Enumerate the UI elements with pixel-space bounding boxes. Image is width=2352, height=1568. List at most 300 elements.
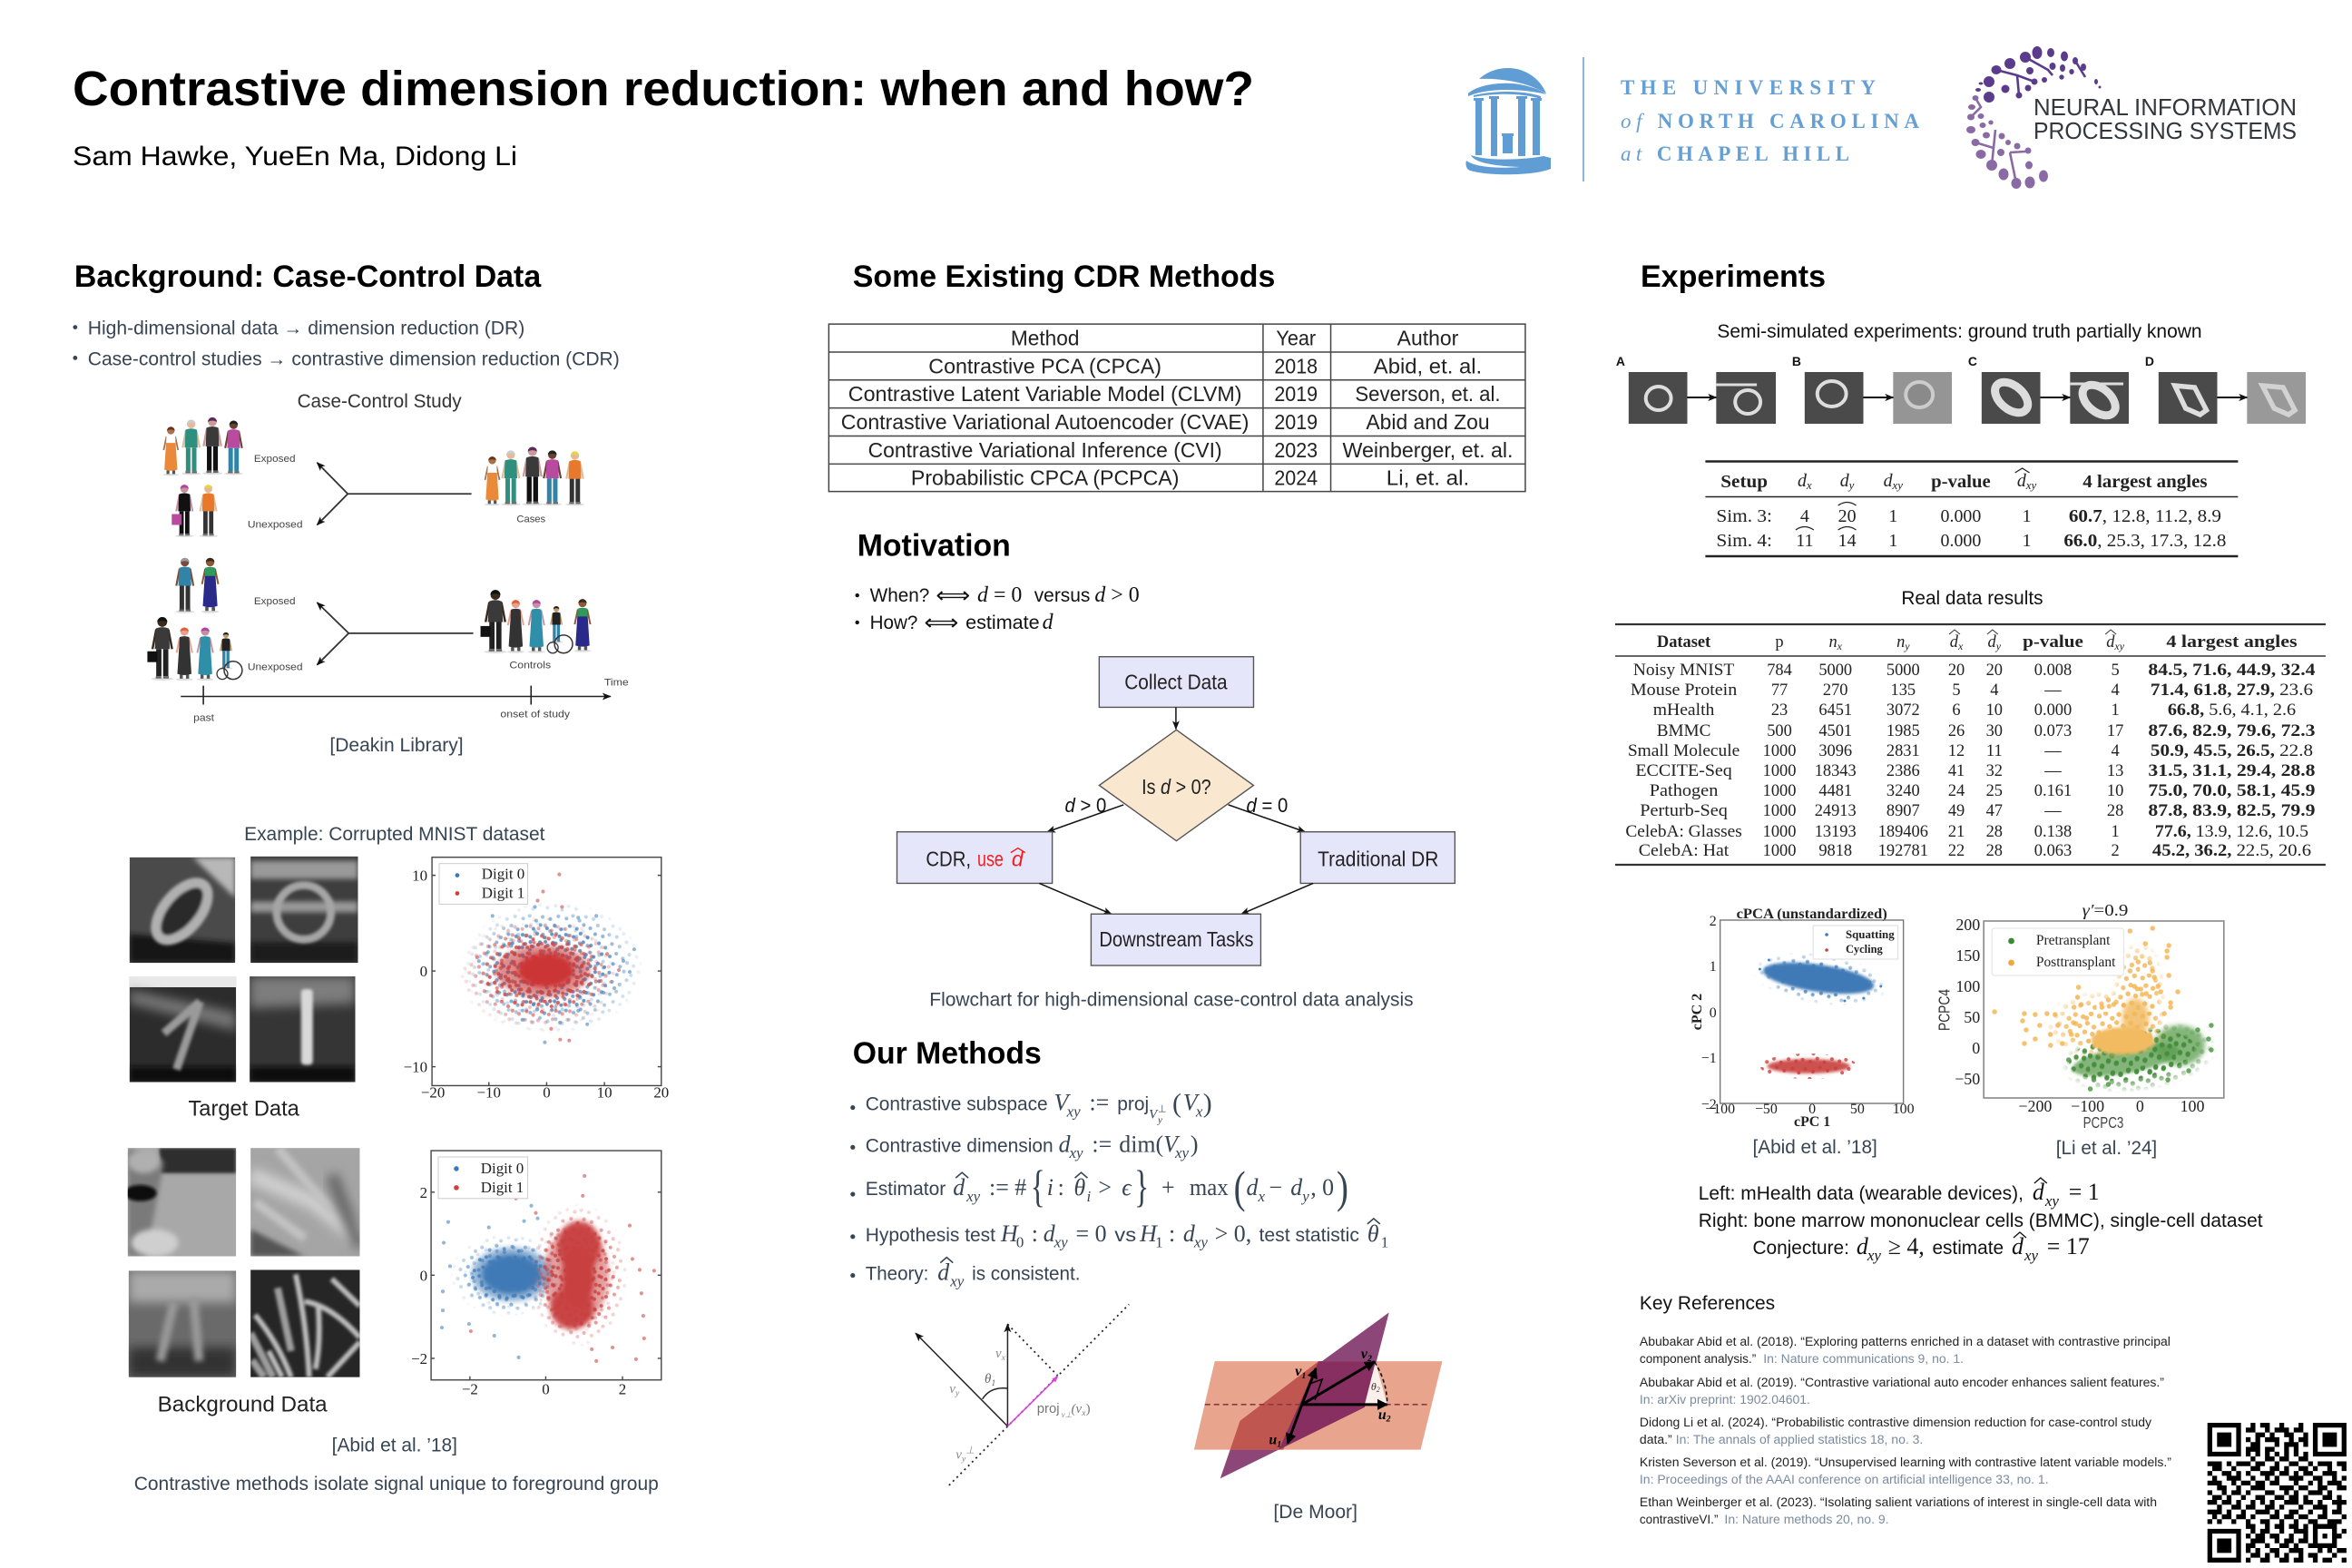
text block: experiment notes: xy — [2024, 1247, 2038, 1264]
table: simulation results: 11 — [1796, 531, 1813, 551]
tick labels: 0 — [542, 1381, 550, 1398]
estimator: + — [1161, 1174, 1175, 1200]
tick labels: 10 — [412, 867, 427, 885]
text block: experiment notes: Conjecture: — [1752, 1238, 1849, 1259]
logo wordmark — [2034, 93, 2297, 144]
heading: experiments: Experiments — [1641, 260, 1826, 294]
table: real data results: 77 — [1771, 681, 1788, 699]
node: downstream tasks — [1091, 914, 1260, 965]
image: target digit 1 slanted — [129, 976, 236, 1082]
tick labels — [411, 1184, 626, 1398]
table: real data results: 50.9, 45.5, 26.5, 22.8 — [2151, 741, 2313, 760]
estimator: Estimator — [866, 1179, 946, 1200]
table header — [1657, 630, 2298, 652]
table: real data results: Perturb-Seq — [1640, 801, 1728, 819]
estimator: d — [953, 1174, 965, 1200]
section: key references and QR — [1640, 1293, 2347, 1563]
table: real data results: 21 — [1948, 822, 1965, 840]
text block: experiment notes: estimate — [1932, 1238, 2004, 1259]
tick labels: −2 — [462, 1381, 478, 1398]
table: existing methods: Contrastive PCA (CPCA) — [928, 354, 1161, 377]
image: background grass light — [250, 1148, 359, 1256]
table: simulation results: Sim. 4: — [1716, 531, 1772, 551]
icon: controls people — [481, 590, 591, 653]
citation: [Abid et al. ’18] — [332, 1435, 457, 1455]
figure: principal angles planes: v — [1361, 1347, 1367, 1362]
table: real data results: 23 — [1771, 701, 1788, 719]
logo wordmark — [1621, 76, 1919, 165]
table: real data results: 30 — [1986, 721, 2003, 740]
hypothesis test: 1 — [1155, 1234, 1163, 1251]
table: existing methods: 2019 — [1274, 382, 1318, 406]
text block: experiment notes: = 1 — [2069, 1179, 2100, 1205]
table: simulation results: 4 — [1800, 506, 1809, 526]
figure: projection geometry: v — [949, 1382, 956, 1396]
bullet list: motivation: d — [1043, 611, 1054, 634]
table: existing methods: Author — [1397, 326, 1459, 349]
figure: projection geometry: y — [955, 1388, 960, 1398]
table: real data results: 4 — [2112, 681, 2120, 699]
table: existing methods: Contrastive Latent Variable Model (CLVM) — [848, 382, 1242, 406]
legend: Digit 0 — [481, 1160, 524, 1177]
label: target data: Target Data — [188, 1096, 300, 1121]
contrastive dimension: xy — [1174, 1144, 1189, 1161]
hypothesis test: H — [1000, 1220, 1019, 1247]
table: real data results: 1000 — [1763, 801, 1796, 819]
estimator: { — [1031, 1161, 1045, 1211]
table header: y — [1995, 640, 2002, 652]
table: real data results: — — [2043, 741, 2062, 760]
table: real data results: 22 — [1948, 841, 1965, 859]
tick labels — [404, 867, 669, 1101]
bullet list: motivation: estimate — [965, 612, 1040, 633]
contrastive dimension: Contrastive dimension — [866, 1135, 1054, 1156]
table: real data results: 10 — [1986, 701, 2003, 719]
table: real data results: 3072 — [1886, 701, 1920, 719]
table: existing methods: Abid and Zou — [1366, 410, 1490, 434]
heading: key references: Key References — [1640, 1293, 1775, 1314]
table: real data results: 31.5, 31.1, 29.4, 28.8 — [2148, 761, 2315, 779]
figure: projection geometry — [916, 1304, 1129, 1485]
image: target digit 1 upright — [250, 976, 356, 1082]
QR code — [2208, 1423, 2347, 1563]
tick labels: 0 — [1808, 1102, 1816, 1117]
figure: case-control study diagram: Case-Control Study — [298, 391, 462, 412]
tick labels: 2 — [1710, 914, 1717, 929]
hypothesis test: > 0, — [1215, 1220, 1251, 1247]
sub-heading: corrupted MNIST: Example: Corrupted MNIST dataset — [244, 824, 545, 845]
text block: experiment notes: d — [1857, 1233, 1869, 1259]
panel: our methods — [850, 1036, 1442, 1523]
tick labels: −50 — [1755, 1102, 1778, 1117]
hypothesis test: xy — [1193, 1234, 1208, 1251]
table: real data results: 1 — [2112, 822, 2120, 840]
table: existing methods: 2019 — [1274, 410, 1318, 434]
table: real data results: 26 — [1948, 721, 1965, 740]
bullet list: motivation: versus — [1034, 585, 1090, 606]
contrastive subspace: V — [1183, 1090, 1200, 1116]
contrastive subspace: Contrastive subspace — [866, 1094, 1048, 1115]
contrastive subspace — [850, 1089, 1212, 1125]
arrow: collect to decision — [1175, 707, 1177, 729]
node: decision — [1099, 730, 1253, 841]
tick labels: 150 — [1955, 946, 1980, 965]
table: real data results — [1615, 624, 2326, 865]
table: real data results: 4 — [1990, 681, 1998, 699]
chart: contrastive scatter — [411, 1151, 662, 1398]
estimator: d — [1290, 1174, 1302, 1200]
references list: Didong Li et al. (2024). “Probabilistic contrastive dimension reduction for case-control study — [1640, 1415, 2151, 1429]
figure: projection geometry: x — [1081, 1408, 1086, 1418]
table: simulation results: p-value — [1931, 472, 1991, 492]
figure: projection geometry: θ — [985, 1372, 991, 1387]
tick labels: −200 — [2018, 1097, 2052, 1115]
table: existing methods: Method — [1011, 326, 1079, 349]
table: real data results: 20 — [1986, 661, 2003, 679]
contrastive subspace: V — [1054, 1090, 1072, 1116]
figure: projection geometry: proj — [1037, 1401, 1060, 1416]
estimator: : — [1058, 1174, 1064, 1200]
estimator: − — [1269, 1174, 1282, 1200]
label: background data: Background Data — [158, 1393, 328, 1417]
hypothesis test: vs — [1114, 1225, 1136, 1246]
figure: principal angles planes: 1 — [1277, 1440, 1281, 1450]
tick labels: 1 — [1710, 959, 1717, 975]
table header: d — [1950, 632, 1958, 651]
hypothesis test: d — [1183, 1220, 1195, 1247]
table: real data results: 87.8, 83.9, 82.5, 79.9 — [2148, 801, 2315, 819]
text block: experiment notes: xy — [1867, 1247, 1881, 1264]
table: real data results: 75.0, 70.0, 58.1, 45.9 — [2148, 781, 2315, 799]
image: background grass dark — [250, 1269, 359, 1377]
caption: flowchart: Flowchart for high-dimensional case-control data analysis — [929, 990, 1414, 1011]
logo wordmark: at CHAPEL HILL — [1621, 142, 1849, 165]
table: simulation results: x — [1806, 478, 1812, 492]
references list: Abubakar Abid et al. (2018). “Exploring patterns enriched in a dataset with contrastive principal — [1640, 1334, 2171, 1348]
table: real data results: 84.5, 71.6, 44.9, 32.4 — [2148, 661, 2315, 679]
contrastive subspace: := — [1089, 1090, 1109, 1116]
table: real data results: 12 — [1948, 741, 1965, 760]
legend — [1813, 926, 1898, 959]
tick labels: −1 — [1701, 1051, 1717, 1066]
table: real data results: 6451 — [1818, 701, 1852, 719]
logo wordmark: of NORTH CAROLINA — [1621, 110, 1919, 132]
text block: experiment notes: d — [2033, 1179, 2045, 1205]
tick labels: 0 — [420, 963, 427, 980]
tick labels: 0 — [543, 1083, 551, 1101]
contrastive dimension: := — [1092, 1131, 1112, 1157]
table header: n — [1828, 632, 1838, 651]
table: real data results: 192781 — [1878, 841, 1928, 859]
tick labels: 0 — [2136, 1097, 2144, 1115]
table: real data results: 1 — [2112, 701, 2120, 719]
icon: unexposed cases people — [172, 485, 218, 537]
text block: experiment notes: Left: mHealth data (wearable devices), — [1699, 1183, 2024, 1204]
tick labels: cPC 1 — [1794, 1114, 1830, 1130]
table header: y — [1904, 640, 1910, 652]
table: real data results: 28 — [2107, 801, 2123, 819]
bullet list — [73, 318, 620, 369]
logo wordmark: NEURAL INFORMATION — [2034, 93, 2297, 121]
theory: d — [937, 1259, 949, 1286]
estimator: y — [1300, 1188, 1309, 1205]
estimator: i — [1047, 1174, 1054, 1200]
axis label: PCPC3: PCPC3 — [2083, 1113, 2123, 1132]
table header: p — [1775, 632, 1784, 651]
estimator: := # — [989, 1174, 1026, 1200]
hypothesis test: test statistic — [1259, 1225, 1359, 1246]
figure: principal angles planes: 1 — [1301, 1371, 1306, 1381]
table: simulation results: 1 — [2023, 531, 2032, 551]
heading: motivation: Motivation — [858, 528, 1011, 563]
contrastive subspace: xy — [1066, 1102, 1081, 1120]
label: controls: Controls — [509, 661, 551, 671]
icon: exposed controls people — [175, 558, 219, 613]
heading: our methods: Our Methods — [853, 1036, 1042, 1071]
references list: In: The annals of applied statistics 18, no. 3. — [1676, 1432, 1923, 1446]
table: real data results: 32 — [1986, 761, 2003, 779]
tick labels: −100 — [2071, 1097, 2104, 1115]
table header: n — [1896, 632, 1905, 651]
table: real data results: 2831 — [1886, 741, 1920, 760]
tick labels: −2 — [1701, 1097, 1717, 1112]
table: simulation results: 0.000 — [1941, 531, 1981, 551]
authors: Sam Hawke, YueEn Ma, Didong Li — [73, 142, 517, 172]
table: existing methods: Contrastive Variational Inference (CVI) — [868, 438, 1222, 462]
tick labels: cPC 2 — [1690, 994, 1705, 1030]
estimator: xy — [965, 1188, 981, 1205]
table: real data results: 4501 — [1818, 721, 1852, 740]
estimator: } — [1134, 1161, 1149, 1211]
table: real data results: 4481 — [1818, 781, 1852, 799]
table: existing methods: Contrastive Variational Autoencoder (CVAE) — [841, 410, 1250, 434]
table: simulation results: Setup — [1720, 472, 1768, 492]
node: CDR: d — [1012, 848, 1024, 871]
contrastive dimension — [850, 1131, 1199, 1161]
table: real data results: 9818 — [1818, 841, 1852, 859]
table: real data results: Noisy MNIST — [1633, 661, 1734, 679]
node: traditional DR: Traditional DR — [1318, 848, 1438, 871]
logo: NeurIPS — [1966, 46, 2297, 189]
table: real data results: 1000 — [1763, 761, 1796, 779]
text block: experiment notes: = 17 — [2047, 1233, 2090, 1259]
flowchart — [897, 657, 1455, 965]
legend: Posttransplant — [2036, 955, 2116, 970]
table: real data results: — — [2043, 681, 2062, 699]
tick labels: −100 — [1705, 1102, 1735, 1117]
chart: target scatter — [404, 858, 669, 1101]
table header: x — [1957, 640, 1964, 652]
table header: d — [1988, 632, 1996, 651]
legend: Digit 0 — [482, 866, 524, 883]
table: real data results: Pathogen — [1650, 781, 1718, 799]
estimator — [850, 1161, 1348, 1212]
table: real data results: 66.8, 5.6, 4.1, 2.6 — [2168, 701, 2296, 719]
table: real data results: 3096 — [1818, 741, 1852, 760]
table: real data results: 4 — [2112, 741, 2120, 760]
tick labels: 0 — [1710, 1005, 1717, 1021]
panel: background case-control data — [73, 260, 669, 1494]
hypothesis test: xy — [1054, 1234, 1068, 1251]
table header: d — [2106, 632, 2114, 651]
table: real data results: Mouse Protein — [1631, 681, 1737, 699]
icon: Old Well — [1465, 68, 1551, 174]
image: target digit 0 on bands — [250, 857, 358, 964]
figure: semi-simulated digit panels — [1616, 354, 2306, 424]
table: real data results: ECCITE-Seq — [1635, 761, 1732, 779]
contrastive dimension: d — [1059, 1131, 1071, 1157]
table: real data results: 0.073 — [2034, 721, 2072, 740]
hypothesis test: Hypothesis test — [866, 1225, 995, 1246]
bullet list: motivation: d = 0 — [977, 583, 1022, 607]
citation: [Deakin Library] — [329, 735, 464, 756]
table: real data results: 17 — [2107, 721, 2123, 740]
figure: projection geometry: v — [956, 1448, 962, 1463]
tick labels: 50 — [1850, 1102, 1865, 1117]
title: Contrastive dimension reduction: when and how? — [73, 62, 1254, 116]
citation: [De Moor] — [1273, 1502, 1357, 1523]
table: simulation results: xy — [2025, 478, 2037, 492]
hypothesis test: 0 — [1016, 1234, 1024, 1251]
table: real data results: 2 — [2112, 841, 2120, 859]
references list: Ethan Weinberger et al. (2023). “Isolating salient variations of interest in single-cell data with — [1640, 1494, 2157, 1509]
hypothesis test: d — [1044, 1220, 1055, 1247]
panel C — [1968, 354, 2129, 424]
label: exposed: Exposed — [254, 454, 296, 465]
contrastive dimension: xy — [1069, 1144, 1083, 1161]
table: real data results: 10 — [2107, 781, 2123, 799]
caption: Contrastive methods isolate signal unique to foreground group — [134, 1474, 659, 1494]
tick labels: 100 — [2180, 1097, 2204, 1115]
table: simulation results: xy — [1892, 478, 1903, 492]
figure: projection geometry: x — [1001, 1353, 1006, 1363]
tick labels: −20 — [421, 1083, 445, 1101]
section: semi-simulated experiments — [1616, 321, 2306, 556]
table: simulation results: d — [1884, 471, 1893, 491]
table: simulation results: y — [1847, 478, 1855, 492]
bullet list: our methods — [850, 1089, 1388, 1290]
text block: experiment notes: ≥ 4, — [1888, 1233, 1925, 1259]
table: real data results: — — [2043, 761, 2062, 779]
tick labels: 2 — [619, 1381, 626, 1398]
table: real data results: CelebA: Hat — [1639, 841, 1730, 859]
node: collect data: Collect Data — [1124, 671, 1228, 694]
table header: Dataset — [1657, 632, 1711, 651]
estimator: , 0 — [1310, 1174, 1334, 1200]
tick labels: −10 — [477, 1083, 501, 1101]
legend: Digit 1 — [481, 1179, 524, 1196]
table: existing methods: Weinberger, et. al. — [1342, 438, 1514, 462]
tick labels — [1690, 914, 1915, 1130]
axes — [431, 1151, 662, 1380]
table: real data results: 47 — [1986, 801, 2003, 819]
figure: projection geometry: 1 — [991, 1378, 995, 1388]
chart: PCPCA BMMC scatter: γ′=0.9 — [2082, 901, 2128, 919]
figure: principal angles planes: u — [1378, 1407, 1387, 1423]
tick labels: 10 — [597, 1083, 612, 1101]
bullet list: Case-control studies → contrastive dimension reduction (CDR) — [88, 348, 620, 369]
figure: principal angles planes: v — [1295, 1364, 1301, 1379]
table: simulation results: d — [1840, 471, 1849, 491]
table: simulation results: 60.7, 12.8, 11.2, 8.9 — [2069, 506, 2221, 526]
panel D: D — [2145, 354, 2154, 368]
legend: Pretransplant — [2036, 933, 2111, 948]
logo wordmark: THE UNIVERSITY — [1621, 76, 1876, 99]
table: real data results: 1000 — [1763, 841, 1796, 859]
references list: Abubakar Abid et al. (2019). “Contrastive variational auto encoder enhances salient features.” — [1640, 1375, 2164, 1389]
tick labels: 100 — [1893, 1102, 1915, 1117]
references list: In: Nature communications 9, no. 1. — [1763, 1351, 1964, 1366]
table: simulation results: 1 — [1888, 531, 1897, 551]
arrow: time axis — [181, 686, 611, 704]
bullet list: motivation: ⟺ — [924, 611, 958, 635]
table: real data results: 13 — [2107, 761, 2123, 779]
estimator: i — [1086, 1188, 1091, 1205]
table: simulation results: Sim. 3: — [1716, 506, 1772, 526]
estimator: > — [1098, 1174, 1112, 1200]
figure: principal angles planes: θ — [1371, 1380, 1377, 1393]
label: exposed: Exposed — [254, 596, 296, 607]
theory: Theory: — [866, 1264, 928, 1285]
bullet list: motivation: How? — [870, 612, 917, 633]
legend — [438, 1157, 528, 1199]
bullet list: motivation: d > 0 — [1094, 583, 1140, 607]
hypothesis test: = 0 — [1076, 1220, 1107, 1247]
table: simulation results — [1705, 461, 2238, 556]
arrow: decision to traditional DR — [1229, 805, 1305, 832]
contrastive subspace: ( — [1172, 1089, 1181, 1119]
table: real data results: 784 — [1767, 661, 1792, 679]
figure: principal angles planes — [1194, 1312, 1442, 1478]
estimator: ( — [1234, 1162, 1246, 1212]
figure: projection geometry: v⊥ — [1062, 1410, 1073, 1419]
tick labels: 0 — [1972, 1039, 1980, 1057]
table: simulation results: d — [2017, 471, 2026, 491]
contrastive subspace: ⊥ — [1158, 1104, 1167, 1115]
table: real data results: 5000 — [1886, 661, 1920, 679]
figure: case-control study diagram — [147, 391, 629, 723]
table: real data results: 11 — [1986, 741, 2003, 760]
tick labels: −50 — [1955, 1070, 1980, 1088]
table: real data results: 28 — [1986, 841, 2003, 859]
node: CDR: CDR, — [926, 848, 971, 871]
hypothesis test: : — [1032, 1220, 1038, 1247]
node: traditional DR — [1300, 832, 1455, 883]
sub-heading: real data results: Real data results — [1901, 588, 2043, 609]
hypothesis test: θ — [1367, 1220, 1379, 1247]
hypothesis test: : — [1169, 1220, 1175, 1247]
tick labels: −10 — [404, 1059, 427, 1076]
estimator: d — [1247, 1174, 1259, 1200]
legend — [1992, 928, 2123, 975]
table: real data results: — — [2043, 801, 2062, 819]
tick labels: 200 — [1955, 916, 1980, 934]
panel B — [1792, 354, 1952, 424]
table header: 4 largest angles — [2166, 632, 2298, 651]
table: real data results: 3240 — [1886, 781, 1920, 799]
table: simulation results: 1 — [1888, 506, 1897, 526]
table: simulation results: 1 — [2023, 506, 2032, 526]
tick labels: 2 — [420, 1184, 427, 1201]
icon: exposed cases people — [163, 417, 243, 475]
arrow: cases to exposure — [317, 463, 472, 524]
hypothesis test: H — [1139, 1220, 1158, 1247]
tick labels: 0 — [420, 1267, 427, 1284]
bullet list: motivation — [856, 583, 1140, 635]
table: existing methods: Abid, et. al. — [1374, 354, 1482, 377]
table: real data results: 135 — [1891, 681, 1916, 699]
citation: [Abid et al. ’18] — [1752, 1137, 1877, 1158]
